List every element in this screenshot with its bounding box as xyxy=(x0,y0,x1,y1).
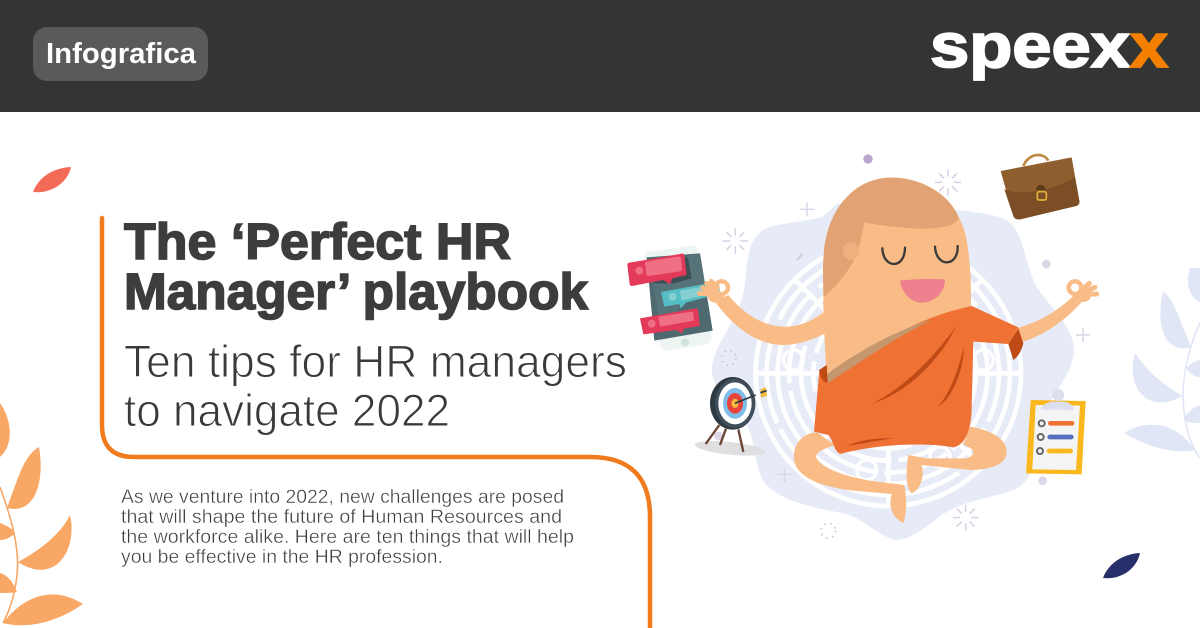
plant: pale blue right xyxy=(1124,268,1200,458)
intro paragraph: that will shape the future of Human Resources and xyxy=(121,507,562,528)
monk: hands xyxy=(699,281,1097,303)
subtitle: to navigate 2022 xyxy=(124,385,450,436)
intro paragraph: the workforce alike. Here are ten things that will help xyxy=(121,527,574,548)
monk: closed eyes xyxy=(882,246,958,264)
icon: archery target xyxy=(694,377,767,458)
intro paragraph xyxy=(121,487,574,568)
illustration: meditating monk xyxy=(627,154,1097,540)
icon: phone with chat bubbles xyxy=(627,246,720,351)
mandala xyxy=(756,240,1021,506)
intro paragraph: you be effective in the HR profession. xyxy=(121,547,443,568)
monk: head and torso xyxy=(823,178,971,383)
monk: arms xyxy=(715,294,1084,345)
chat bubble: teal middle xyxy=(661,281,720,308)
decorative leaf: navy xyxy=(1103,553,1140,578)
monk: mouth xyxy=(900,279,945,303)
header bar xyxy=(0,0,1200,112)
decorative sparkles xyxy=(723,169,979,531)
icon: clipboard checklist xyxy=(1026,389,1086,474)
chat bubble: red bottom xyxy=(640,308,700,334)
background blob xyxy=(712,203,1074,540)
decorative leaf: red xyxy=(33,167,71,192)
decorative dots xyxy=(714,154,1051,485)
title: The ‘Perfect HR xyxy=(124,213,511,270)
title: Manager’ playbook xyxy=(124,263,589,320)
badge: Infografica: Infografica xyxy=(46,38,197,70)
decorative plus signs xyxy=(778,202,1090,482)
icon: briefcase xyxy=(1001,155,1079,219)
intro paragraph: As we venture into 2022, new challenges are posed xyxy=(121,487,564,508)
badge: Infografica xyxy=(33,27,208,81)
title xyxy=(124,213,589,320)
logo: speexx: x xyxy=(1130,12,1169,81)
plant: orange left xyxy=(0,403,83,625)
decorative dotted circles xyxy=(721,351,836,538)
monk: ear xyxy=(843,242,859,260)
frame: orange rounded line xyxy=(102,218,650,628)
subtitle: Ten tips for HR managers xyxy=(124,336,627,387)
monk: robe xyxy=(814,306,1023,454)
monk: legs and feet xyxy=(794,427,1007,523)
logo: speexx: speex xyxy=(930,12,1131,81)
chat bubble: red top xyxy=(627,254,692,286)
monk: hair xyxy=(823,178,959,297)
subtitle xyxy=(124,336,627,436)
